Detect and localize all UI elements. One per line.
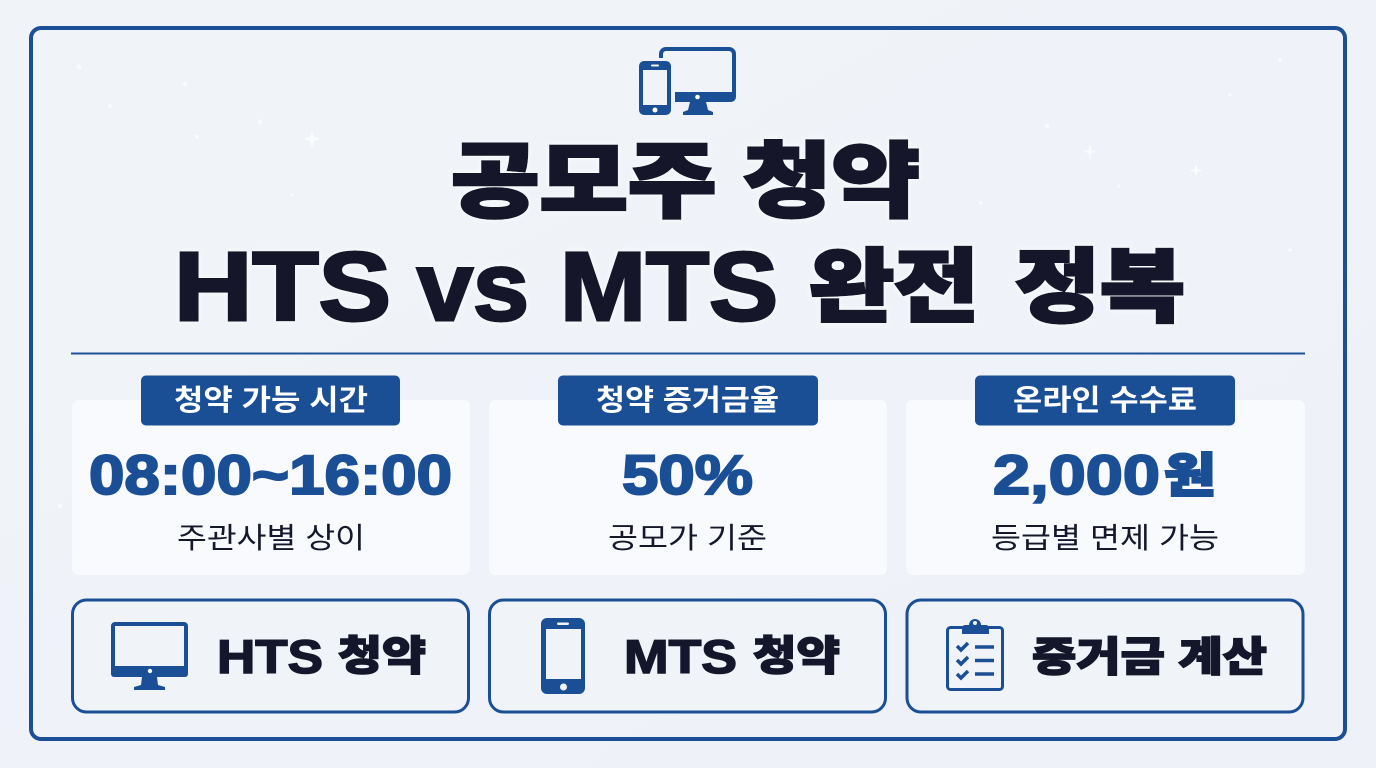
icon: clipboard <box>948 619 1002 690</box>
title: vs <box>417 232 529 341</box>
button: MTS <box>490 600 886 712</box>
panel: deposit rate <box>489 376 887 575</box>
title: 정복 <box>1015 243 1185 332</box>
title <box>174 137 1185 341</box>
value: rate: 50% <box>622 443 753 506</box>
value: hours: 08:00~16:00 <box>89 443 452 506</box>
label: MTS: MTS <box>624 630 737 683</box>
value: fee: 2,000 <box>993 443 1160 506</box>
note: waiver by grade: 등급별 면제 가능 <box>991 522 1219 555</box>
title: 완전 <box>809 243 979 332</box>
note: differs by underwriter: 주관사별 상이 <box>177 523 365 555</box>
label: HTS: 청약 <box>338 633 426 679</box>
icon: phone <box>541 618 585 694</box>
button: HTS <box>72 600 468 712</box>
label: MTS <box>624 630 840 683</box>
title: 공모주 청약 <box>451 137 920 228</box>
icon: monitor <box>111 624 188 690</box>
title: MTS <box>560 232 778 341</box>
badge: online fee <box>975 376 1235 426</box>
label: MTS: 청약 <box>753 633 840 679</box>
value: fee: 원 <box>1164 449 1216 502</box>
panel: subscription hours <box>72 376 470 575</box>
badge: subscription hours: 청약 가능 시간 <box>174 384 368 417</box>
label: HTS: HTS <box>217 630 323 683</box>
badge: deposit rate: 청약 증거금율 <box>596 384 779 417</box>
button: deposit calculation <box>907 600 1303 712</box>
title: HTS <box>174 232 391 341</box>
label: HTS <box>217 630 426 683</box>
panel: online fee <box>906 376 1305 575</box>
badge: subscription hours <box>141 376 400 426</box>
badge: deposit rate <box>558 376 818 426</box>
value: fee <box>993 443 1216 506</box>
label: deposit calculation: 증거금 계산 <box>1032 634 1267 680</box>
icon: monitor and phone <box>639 49 736 115</box>
note: based on offer price: 공모가 기준 <box>608 523 767 555</box>
badge: online fee: 온라인 수수료 <box>1013 384 1197 417</box>
